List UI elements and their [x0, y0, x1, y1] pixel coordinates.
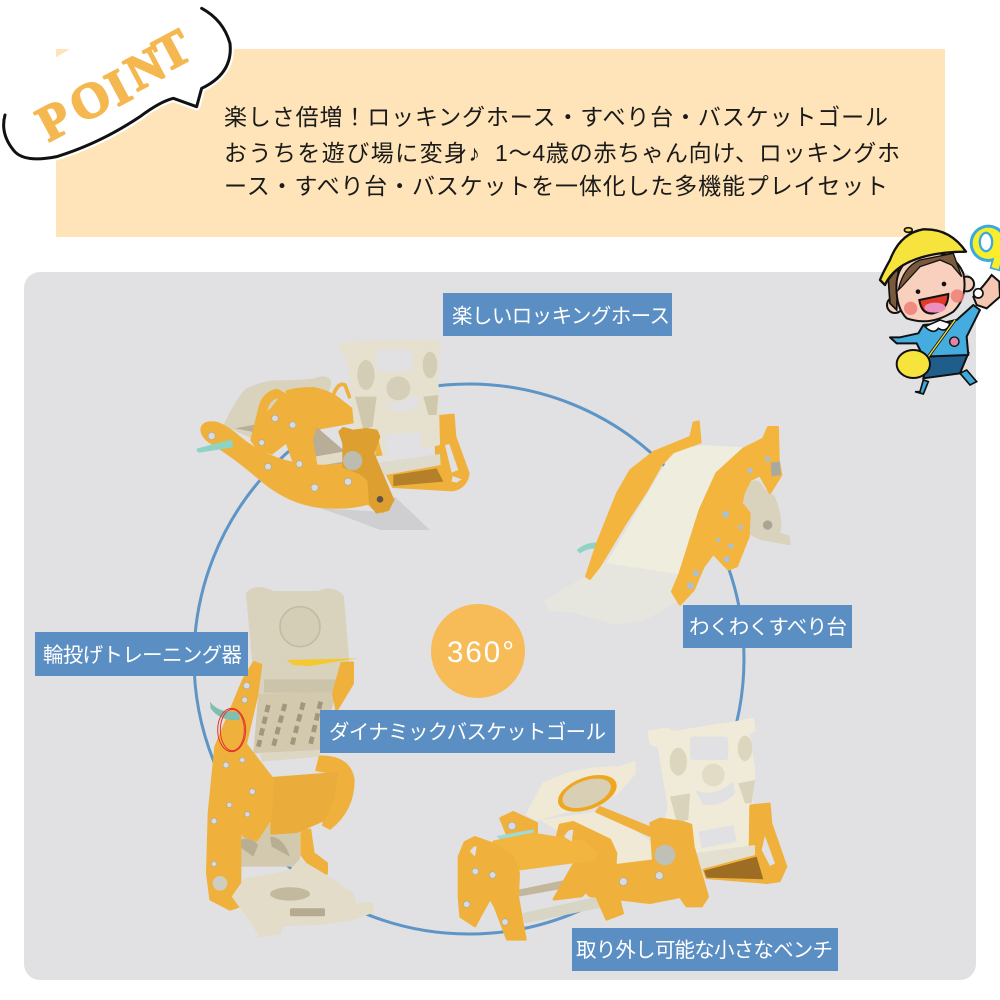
intro text block: おうちを遊び場に変身♪: [224, 140, 480, 166]
speech bubble: POINT: [4, 8, 230, 159]
product: rocking horse: [197, 341, 468, 530]
main grey panel: [24, 272, 976, 980]
label: slide: わくわくすべり台: [689, 616, 847, 639]
speech bubble: POINT: T: [144, 17, 200, 83]
label: slide: [683, 605, 852, 648]
label: basketball goal: [320, 710, 615, 753]
label: basketball goal: ダイナミックバスケットゴール: [329, 721, 606, 744]
intro text block: [224, 104, 900, 199]
label: ring toss: [35, 632, 248, 676]
360 degree badge: [431, 604, 525, 698]
speech bubble: POINT: O: [60, 66, 120, 134]
product: slide: [545, 421, 789, 623]
mascot: child in yellow hat: [880, 225, 1000, 394]
360 degree badge: 360°: [447, 636, 514, 669]
label: removable bench: [572, 928, 838, 971]
product: upright basketball mode: [207, 588, 373, 936]
OK mark: number nine glyph: [970, 225, 1000, 270]
product: removable bench: [459, 719, 786, 939]
blue rotation ring: [194, 384, 744, 934]
speech bubble: POINT: N: [116, 35, 174, 101]
label: ring toss: 輪投げトレーニング器: [43, 644, 242, 667]
speech bubble: POINT: I: [96, 58, 140, 116]
intro text block: 楽しさ倍増！ロッキングホース・すべり台・バスケットゴール: [224, 104, 888, 130]
intro text block: ース・すべり台・バスケットを一体化した多機能プレイセット: [224, 173, 888, 199]
label: rocking horse: 楽しいロッキングホース: [452, 305, 670, 328]
top banner panel: [56, 49, 945, 237]
label: removable bench: 取り外し可能な小さなベンチ: [576, 939, 833, 962]
label: rocking horse: [443, 293, 672, 336]
intro text block: 1〜4歳の赤ちゃん向け、ロッキングホ: [495, 140, 900, 166]
speech bubble: POINT: P: [27, 88, 81, 152]
